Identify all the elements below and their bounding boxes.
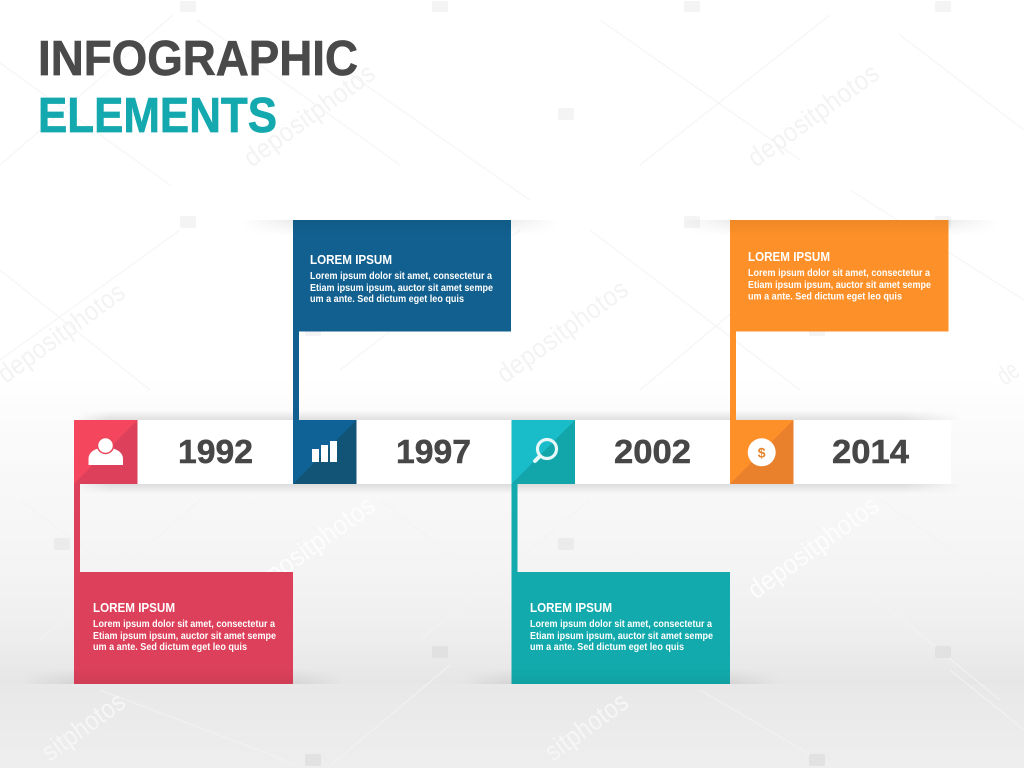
watermark pattern: depositphotos xyxy=(742,489,885,605)
icon: dollar coin xyxy=(730,420,794,484)
title: ELEMENTS xyxy=(38,89,277,143)
icon: magnifier xyxy=(512,420,575,484)
year 2014: 2014 xyxy=(832,433,910,470)
panel: blue text box: Lorem ipsum dolor sit amet, consectetur a xyxy=(310,271,493,282)
watermark pattern: sitphotos xyxy=(36,686,131,767)
panel: red text box xyxy=(74,572,293,684)
milestone 2002 xyxy=(512,420,730,684)
panel: teal text box: Lorem ipsum dolor sit amet, consectetur a xyxy=(530,619,713,630)
panel: teal text box xyxy=(512,572,730,684)
milestone 1992 xyxy=(74,420,293,684)
panel: red text box: um a ante. Sed dictum eget leo quis xyxy=(93,642,247,653)
panel: blue text box: um a ante. Sed dictum eget leo quis xyxy=(310,294,464,305)
panel: orange text box: LOREM IPSUM xyxy=(748,250,830,264)
connector: blue stem xyxy=(293,331,299,420)
watermark pattern: depositphotos xyxy=(238,489,381,605)
watermark pattern: depositphotos xyxy=(238,57,381,173)
timeline bar xyxy=(137,420,951,484)
milestone 2014 xyxy=(730,220,948,484)
connector: teal stem xyxy=(512,484,518,572)
panel: orange text box: Etiam ipsum ipsum, auctor sit amet sempe xyxy=(748,280,932,291)
watermark pattern: depositphotos xyxy=(491,273,634,389)
panel: orange text box: Lorem ipsum dolor sit amet, consectetur a xyxy=(748,268,931,279)
milestone 1997 xyxy=(293,220,511,484)
panel: blue text box: LOREM IPSUM xyxy=(310,253,392,267)
panel: orange text box: um a ante. Sed dictum eget leo quis xyxy=(748,292,902,302)
year 1992: 1992 xyxy=(178,433,253,470)
title: INFOGRAPHIC xyxy=(38,32,358,86)
panel: blue text box: Etiam ipsum ipsum, auctor sit amet sempe xyxy=(310,283,494,294)
watermark pattern: depositphotos xyxy=(742,57,885,173)
panel: blue text box xyxy=(293,220,511,332)
panel: red text box: LOREM IPSUM xyxy=(93,601,175,615)
icon: bar chart xyxy=(293,420,356,484)
panel: teal text box: um a ante. Sed dictum eget leo quis xyxy=(530,642,684,653)
icon: person xyxy=(74,420,138,484)
timeline bar shadow xyxy=(85,413,944,491)
panel: teal text box: LOREM IPSUM xyxy=(530,601,612,615)
panel shadows xyxy=(20,220,1000,684)
title xyxy=(38,32,358,143)
connector: orange stem xyxy=(730,331,736,420)
panel: red text box: Lorem ipsum dolor sit amet, consectetur a xyxy=(93,619,276,630)
panel: red text box: Etiam ipsum ipsum, auctor sit amet sempe xyxy=(93,631,277,642)
panel: orange text box xyxy=(730,220,948,332)
icon: dollar coin: $ xyxy=(758,444,766,460)
watermark pattern: sitphotos xyxy=(539,686,634,767)
connector: red stem xyxy=(74,484,80,572)
year 2002: 2002 xyxy=(614,433,691,470)
year 1997: 1997 xyxy=(396,433,471,470)
panel: teal text box: Etiam ipsum ipsum, auctor sit amet sempe xyxy=(530,631,714,642)
